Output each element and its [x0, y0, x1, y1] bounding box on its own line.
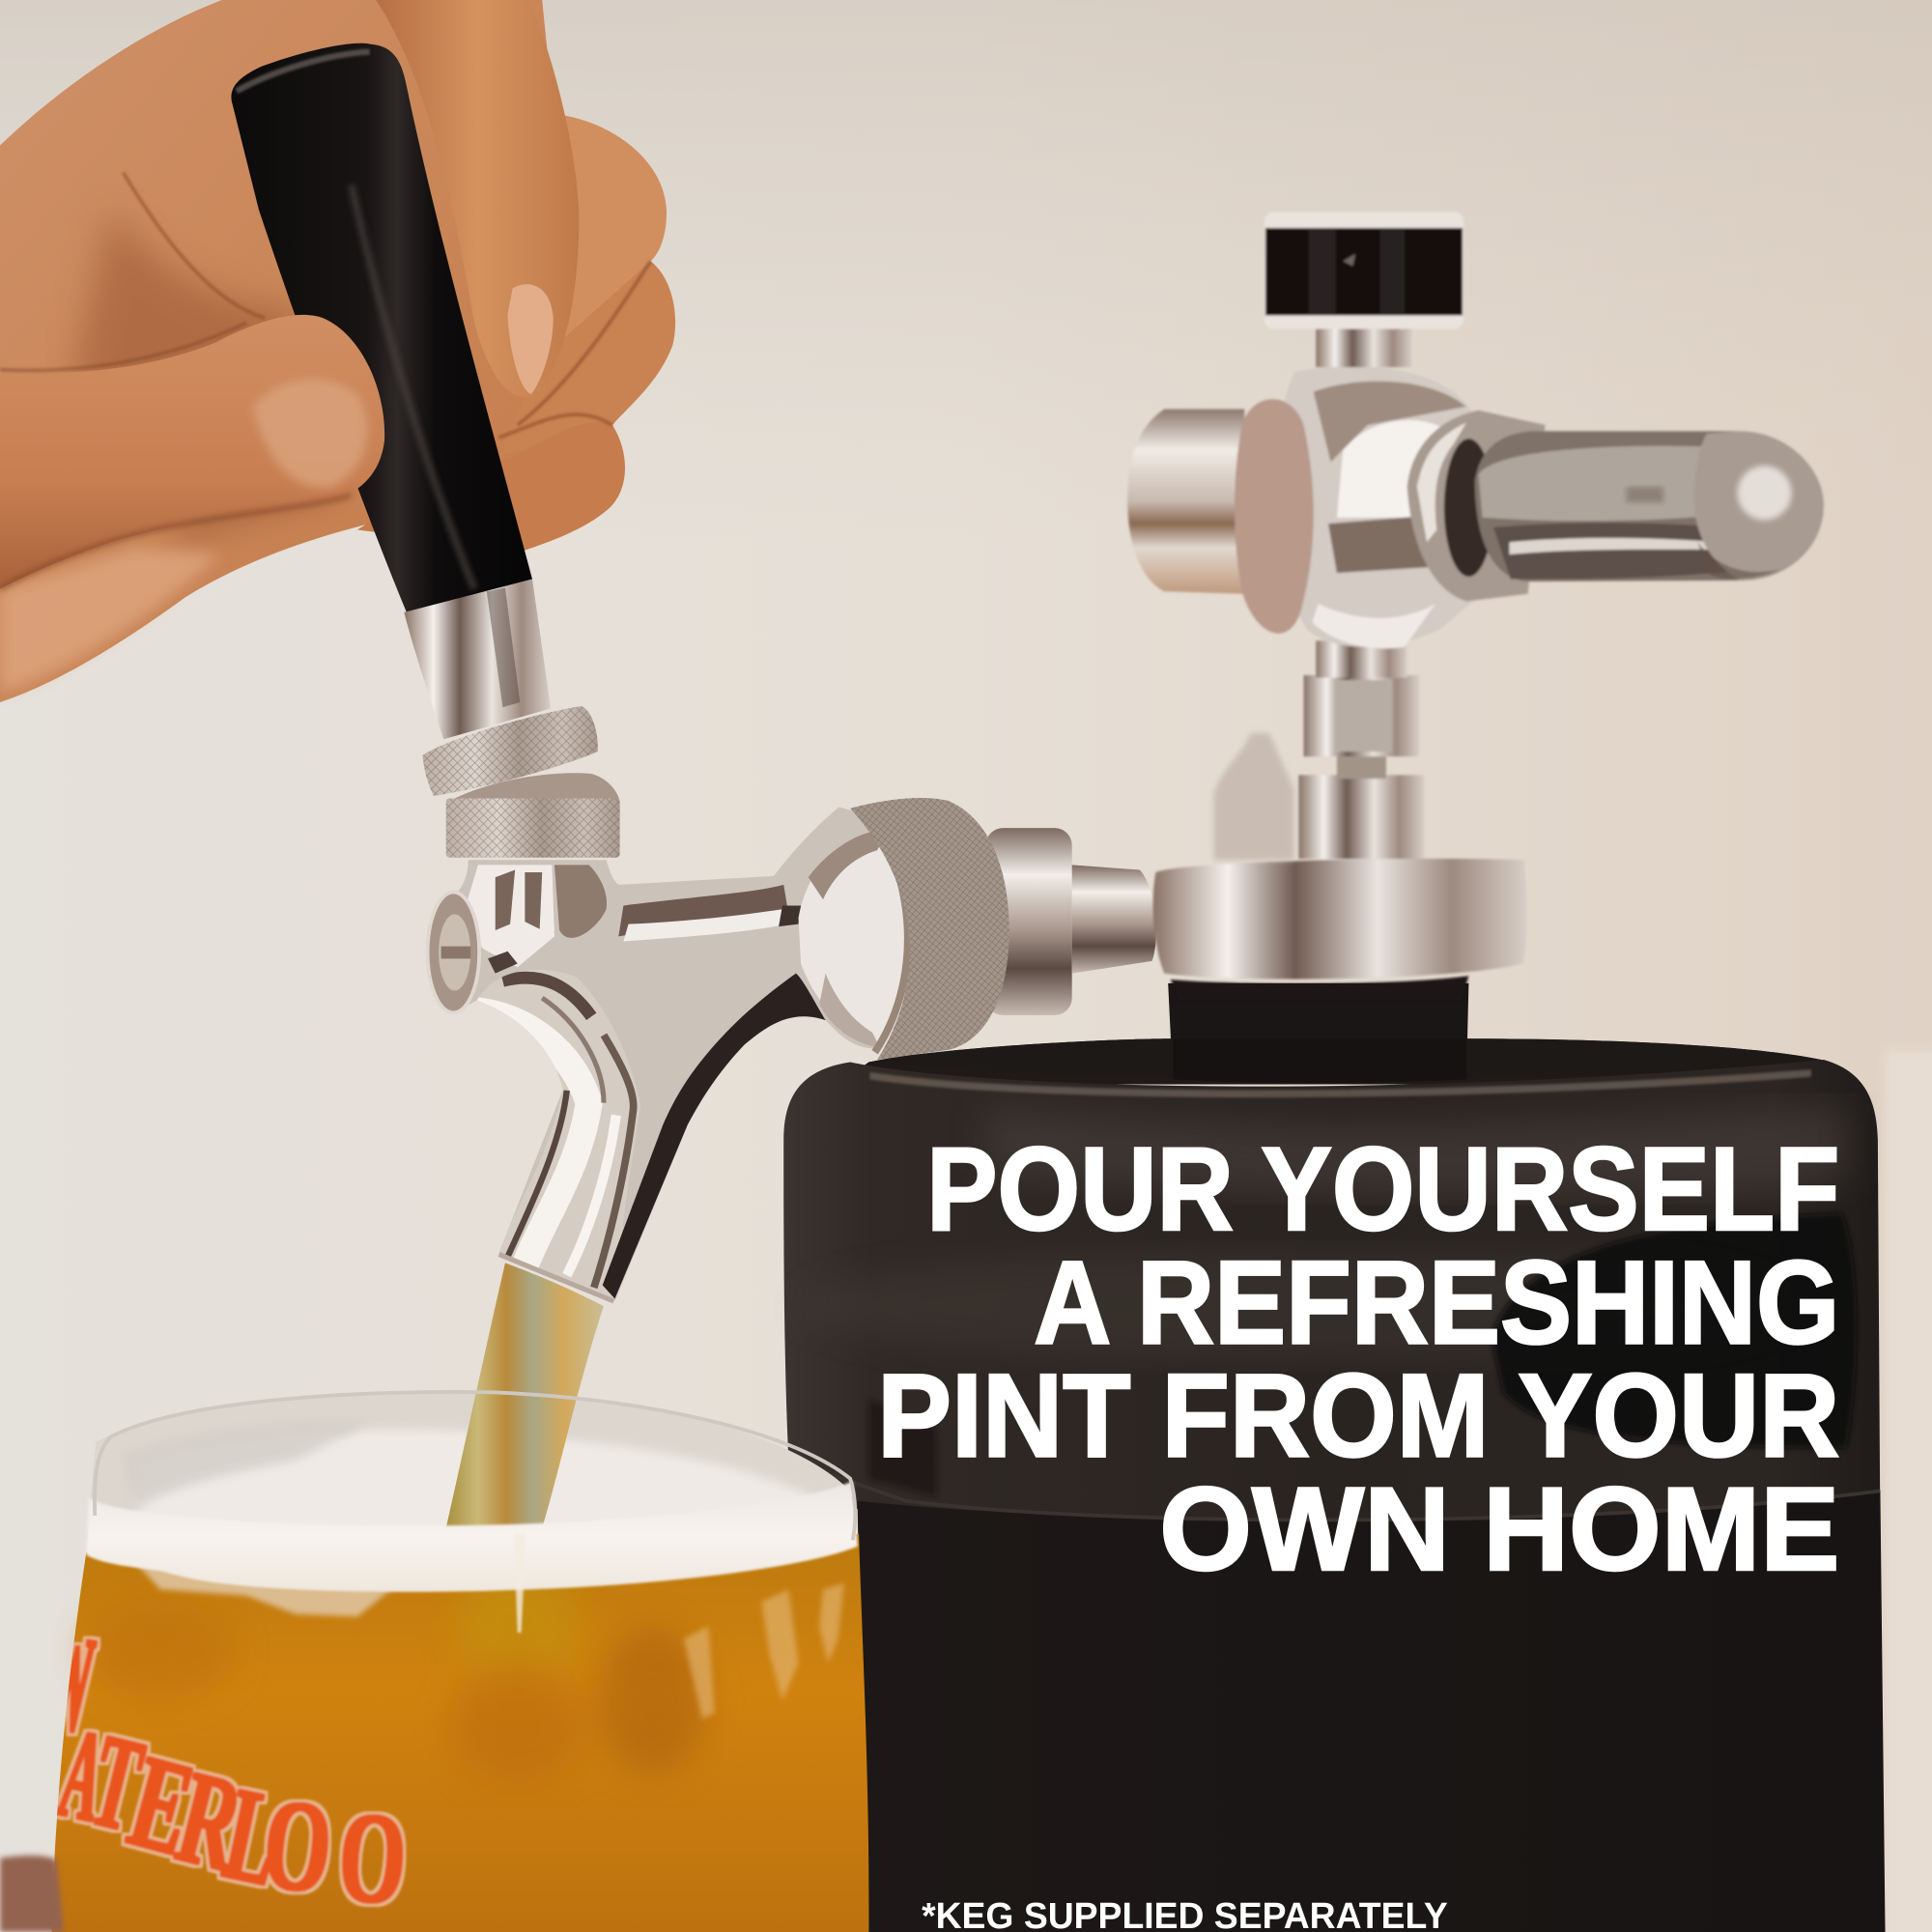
icon: upper knurled ring — [423, 706, 598, 796]
WATERLOO logo: E — [117, 1726, 208, 1884]
icon: faucet side port — [428, 892, 479, 1012]
thumb shadow line — [0, 496, 352, 589]
icon: hand front (thumb and index finger) — [0, 0, 579, 589]
icon: regulator side plate — [1235, 399, 1314, 634]
WATERLOO logo: R — [165, 1744, 256, 1900]
keg lower section — [858, 1491, 1886, 1932]
keg highlight — [801, 1251, 1786, 1361]
icon: tap handle — [231, 43, 532, 612]
middle finger knuckle — [518, 113, 667, 370]
icon: gas regulator assembly — [1127, 212, 1824, 1001]
thumb highlight — [252, 379, 367, 488]
icon: beer stream — [446, 1263, 604, 1528]
light reflection — [514, 1534, 526, 1633]
icon: stem below dial — [1316, 327, 1412, 367]
keg neck front — [1173, 1038, 1466, 1083]
beer shading — [86, 1565, 708, 1786]
icon: knurled coupling nut — [850, 798, 1009, 1060]
icon: neck below ball — [1316, 640, 1407, 678]
icon: flared bell — [799, 828, 908, 1042]
ring finger — [499, 261, 675, 456]
WATERLOO logo: T — [78, 1707, 155, 1860]
palm — [0, 0, 579, 702]
icon: beer glass — [40, 1263, 868, 1932]
WATERLOO logo: O — [257, 1771, 338, 1920]
thumb — [0, 315, 384, 589]
icon: regulator back dial — [1127, 409, 1244, 594]
icon: black o-ring — [1171, 976, 1468, 1001]
headline line 1: POUR YOURSELF — [926, 1122, 1839, 1255]
icon: regulator base plate — [1153, 859, 1527, 980]
icon: cartridge domed tip — [1694, 431, 1824, 581]
icon: head reflections — [462, 865, 554, 967]
icon: relief valve — [1213, 733, 1293, 860]
condensation on glass — [684, 1583, 844, 1719]
keg left slot — [868, 1399, 936, 1497]
icon: hand back (palm and rear fingers) — [0, 0, 675, 702]
icon: upper hex fitting — [1303, 675, 1419, 756]
index fingernail — [508, 284, 554, 394]
finger creases — [499, 261, 650, 438]
WATERLOO logo — [57, 1634, 408, 1909]
keg rim back — [838, 1038, 1848, 1084]
foreground finger — [0, 1856, 64, 1932]
keg lip highlight — [870, 1069, 1811, 1097]
icon: connector behind nut — [985, 828, 1156, 1015]
headline — [877, 1122, 1839, 1595]
icon: regulator ball body — [1244, 366, 1540, 647]
icon: chrome faucet body — [428, 807, 918, 1319]
little finger — [357, 422, 625, 551]
icon: neck reflections — [618, 885, 788, 936]
headline line 3: PINT FROM YOUR — [877, 1350, 1839, 1482]
glass rim — [95, 1392, 855, 1540]
icon: pressure dial — [1264, 212, 1463, 329]
icon: chrome handle collar — [404, 579, 551, 739]
keg body — [783, 1060, 1883, 1932]
headline line 2: A REFRESHING — [1034, 1236, 1839, 1368]
icon: spout rim — [499, 1254, 613, 1301]
WATERLOO logo: O — [334, 1784, 411, 1932]
icon: spout chrome — [477, 970, 640, 1300]
beer body — [52, 1534, 868, 1932]
icon: faucet casting — [435, 807, 918, 1301]
keg neck — [1168, 983, 1468, 1084]
icon: dark web edge — [603, 974, 826, 1298]
index finger — [376, 0, 579, 398]
keg rim inner shadow — [868, 1038, 1821, 1079]
frosty foam edge — [124, 1422, 370, 1509]
keg handle cutout — [1491, 1213, 1857, 1448]
thumb top crease — [0, 323, 246, 370]
icon: CO2 cartridge — [1475, 431, 1824, 582]
WATERLOO logo: W — [40, 1604, 101, 1761]
palm shadow — [74, 210, 345, 542]
icon: gas cartridge hex nut — [1407, 411, 1545, 601]
lower palm light — [0, 549, 222, 693]
keg — [783, 983, 1886, 1932]
WATERLOO logo: A — [49, 1702, 116, 1850]
foam back surface — [135, 1430, 838, 1540]
keg step — [788, 1460, 1880, 1520]
foam drips — [135, 1562, 394, 1616]
headline line 4: OWN HOME — [1159, 1463, 1839, 1595]
WATERLOO logo: L — [213, 1761, 293, 1915]
icon: lower knurled ring — [446, 773, 620, 858]
glass back wall — [86, 1392, 856, 1540]
foam head — [86, 1481, 858, 1592]
keg shoulder sheen — [985, 1103, 1848, 1196]
icon: lower hex fitting — [1298, 775, 1424, 859]
